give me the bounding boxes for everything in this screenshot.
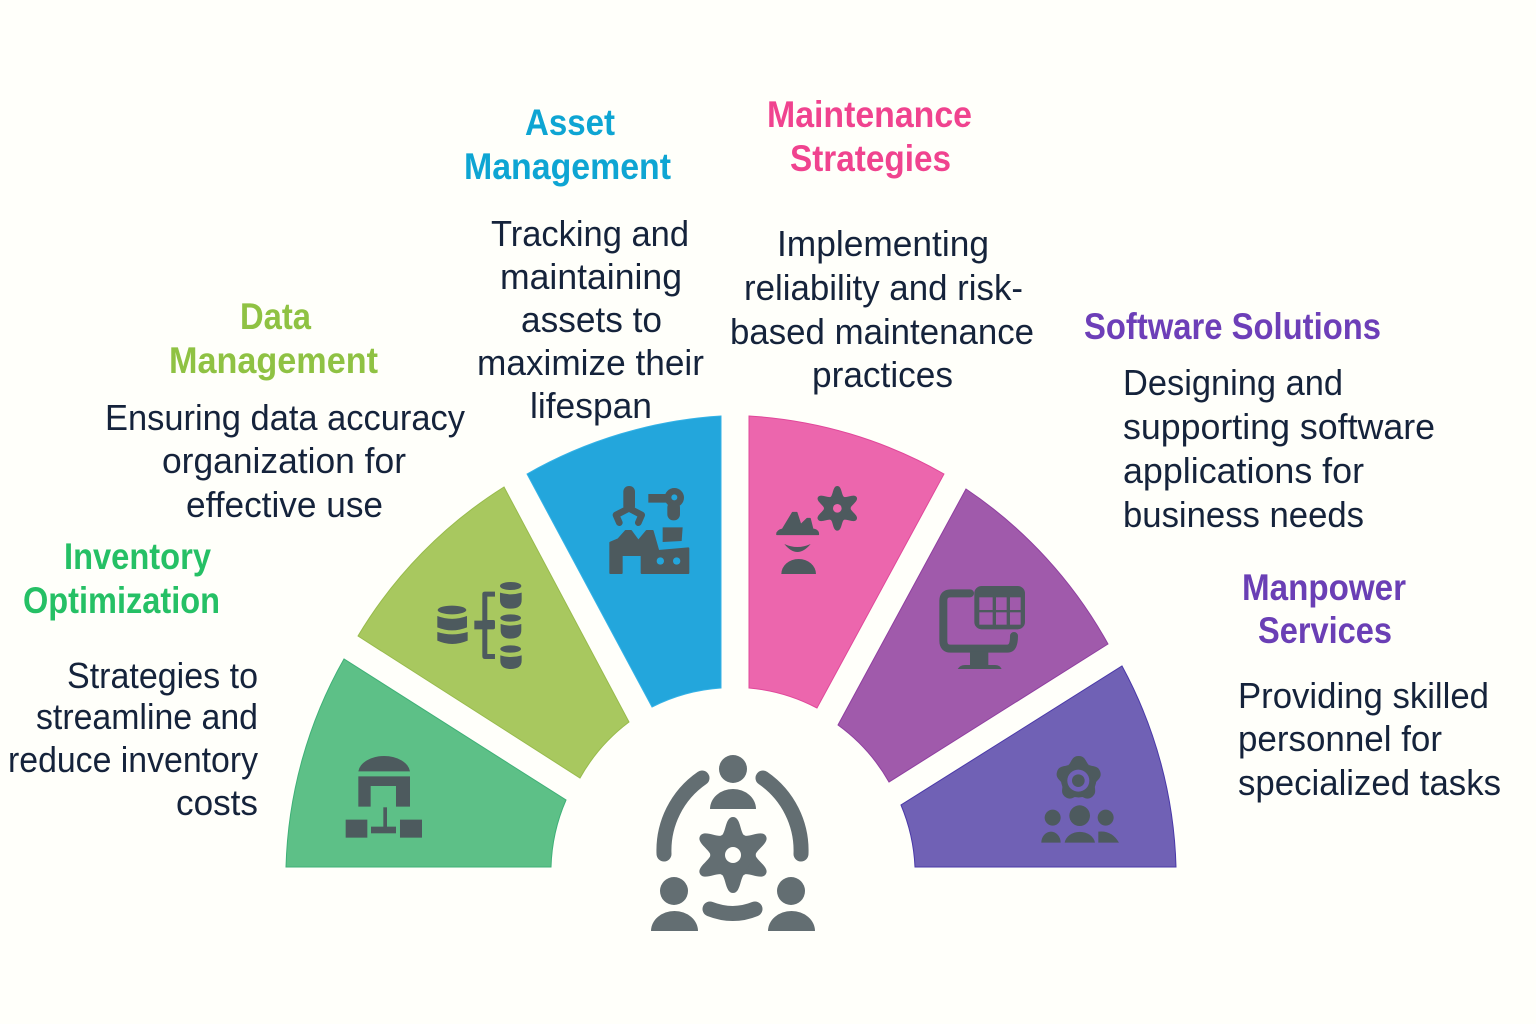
text: Asset Management description	[477, 213, 704, 426]
heading: Manpower Services	[1242, 567, 1406, 651]
segment: blue	[527, 416, 721, 707]
panel: inventory optimization segment	[286, 659, 566, 867]
panel: data management segment	[358, 487, 629, 778]
heading: Asset Management: Asset	[525, 102, 615, 143]
text: Asset Management description: maximize their	[477, 342, 704, 383]
panel: software solutions segment	[838, 489, 1108, 782]
text: Maintenance Strategies description: reliability and risk-	[744, 267, 1023, 308]
segment: indigo	[901, 666, 1176, 867]
text: Inventory Optimization description: streamline and	[36, 696, 258, 737]
text: Inventory Optimization description: Strategies to	[67, 655, 258, 696]
heading: Software Solutions: Software Solutions	[1084, 306, 1381, 347]
text: Inventory Optimization description	[8, 655, 258, 823]
heading: Data Management: Management	[169, 340, 378, 381]
icon: factory and robot arm	[610, 486, 688, 573]
text: Asset Management description: lifespan	[530, 385, 652, 426]
heading: Maintenance Strategies	[767, 94, 972, 179]
heading: Asset Management: Management	[464, 146, 671, 187]
heading: Maintenance Strategies: Strategies	[790, 138, 951, 179]
icon: team and gear	[1041, 756, 1119, 843]
text: Inventory Optimization description: reduce inventory	[8, 739, 258, 780]
heading: Manpower Services: Manpower	[1242, 567, 1406, 608]
panel: asset management segment	[527, 416, 721, 707]
segment: olive	[358, 487, 629, 778]
heading: Manpower Services: Services	[1258, 610, 1392, 651]
text: Manpower Services description: specialized tasks	[1238, 762, 1501, 803]
text: Data Management description: Ensuring data accuracy	[105, 397, 465, 438]
text: Asset Management description: assets to	[521, 299, 662, 340]
heading: Inventory Optimization	[23, 536, 220, 621]
text: Software Solutions description: business needs	[1123, 494, 1364, 535]
text: Manpower Services description	[1238, 675, 1501, 803]
text: Inventory Optimization description: costs	[176, 782, 258, 823]
icon: database hierarchy	[437, 582, 522, 669]
text: Software Solutions description	[1123, 362, 1435, 535]
text: Software Solutions description: supporting software	[1123, 406, 1435, 447]
text: Data Management description: organization for	[162, 440, 406, 481]
text: Software Solutions description: applications for	[1123, 450, 1364, 491]
heading: Data Management	[169, 296, 378, 381]
segment: pink	[749, 416, 944, 708]
heading: Inventory Optimization: Inventory	[64, 536, 211, 577]
heading: Maintenance Strategies: Maintenance	[767, 94, 972, 135]
panel: manpower services segment	[901, 666, 1176, 867]
segment: purple	[838, 489, 1108, 782]
heading: Data Management: Data	[240, 296, 311, 337]
text: Manpower Services description: personnel for	[1238, 718, 1442, 759]
heading: Inventory Optimization: Optimization	[23, 580, 220, 621]
text: Manpower Services description: Providing skilled	[1238, 675, 1489, 716]
text: Maintenance Strategies description: based maintenance	[730, 311, 1034, 352]
panel: maintenance strategies segment	[749, 416, 944, 708]
text: Maintenance Strategies description	[730, 223, 1034, 395]
icon: technician and gear	[777, 486, 860, 574]
text: Asset Management description: maintaining	[500, 256, 682, 297]
text: Data Management description	[105, 397, 465, 525]
text: Software Solutions description: Designing and	[1123, 362, 1343, 403]
heading: Asset Management	[464, 102, 671, 187]
icon: monitor with grid	[943, 586, 1025, 669]
text: Data Management description: effective use	[186, 484, 383, 525]
text: Maintenance Strategies description: Implementing	[777, 223, 989, 264]
icon: central team around gear	[651, 755, 815, 931]
segment: green	[286, 659, 566, 867]
text: Asset Management description: Tracking and	[491, 213, 689, 254]
icon: warehouse network	[346, 756, 422, 838]
text: Maintenance Strategies description: practices	[812, 354, 953, 395]
